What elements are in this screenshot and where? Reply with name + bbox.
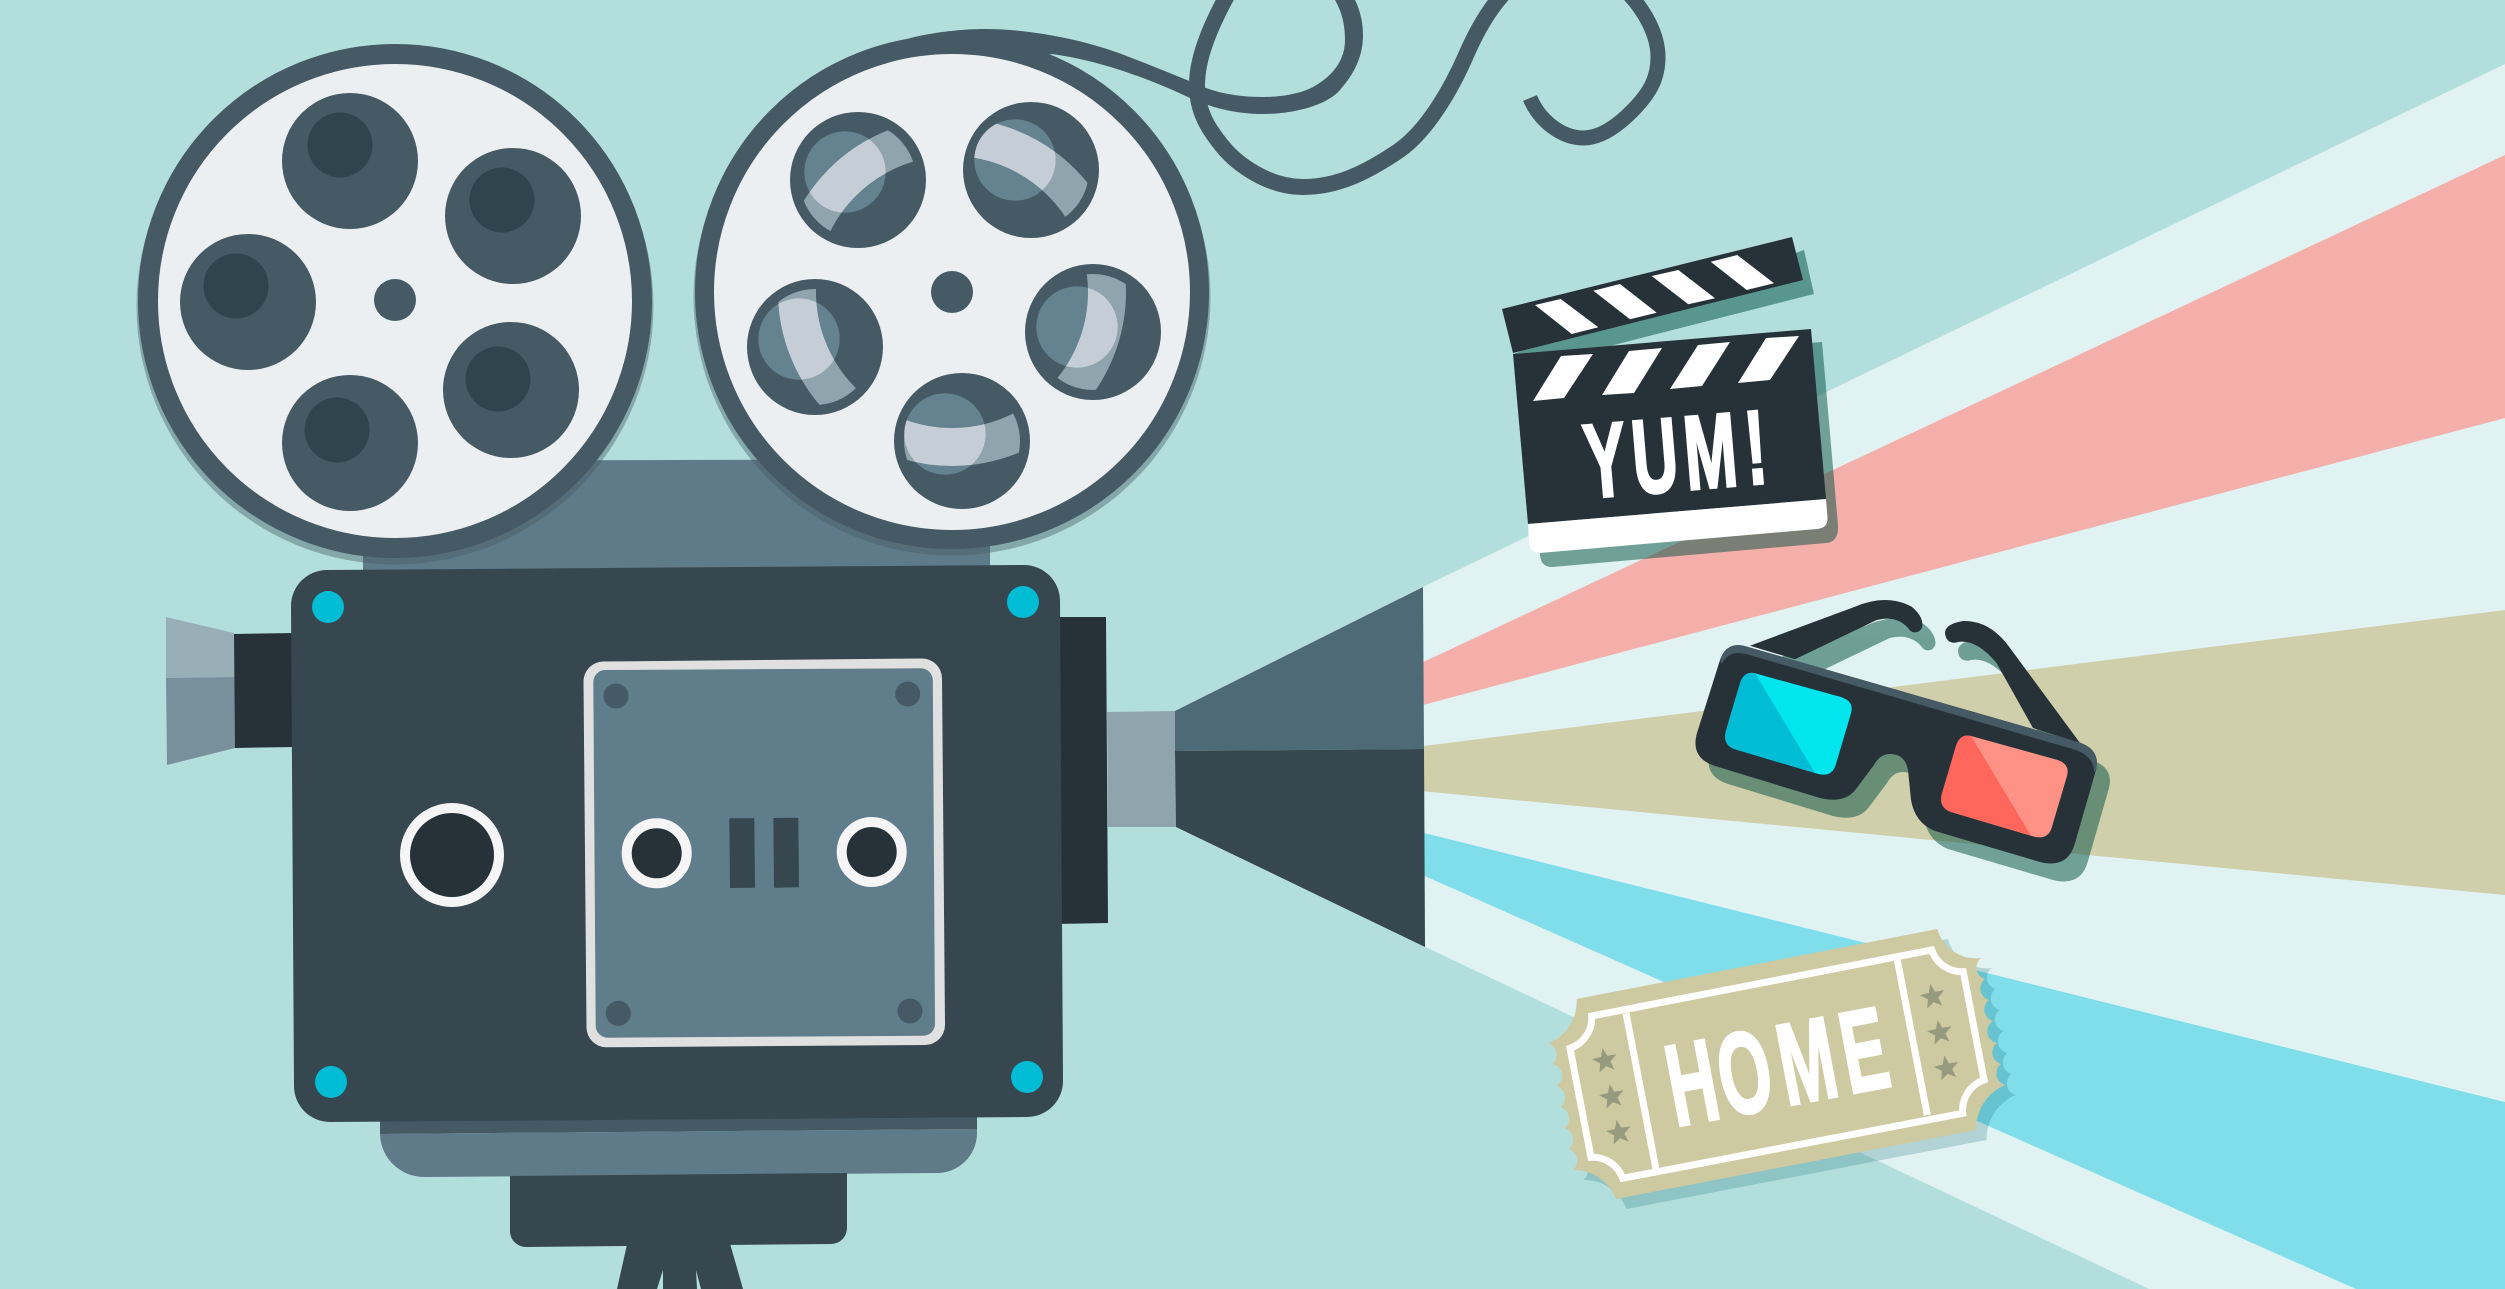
ray: cyan bbox=[1400, 827, 2505, 1289]
horn bottom bbox=[1175, 749, 1425, 947]
panel face bbox=[593, 668, 935, 1038]
left reel shadow bbox=[136, 48, 654, 564]
left reel disc bbox=[148, 54, 642, 548]
highlight overlaps on inner circles bbox=[797, 137, 1107, 447]
panel left knob bbox=[627, 823, 687, 883]
ticket inner border bbox=[1570, 950, 1984, 1178]
ray: pink bbox=[1400, 155, 2505, 711]
glasses frame bbox=[1695, 645, 2097, 863]
tripod legs bbox=[617, 1240, 743, 1289]
film strand from reel bbox=[900, 0, 1363, 114]
control panel bbox=[583, 658, 945, 1047]
film projector bbox=[136, 0, 1658, 1289]
film loop bbox=[1197, 0, 1505, 187]
upper housing behind reels bbox=[363, 459, 990, 575]
clapper arm bbox=[1502, 237, 1803, 353]
cinema ticket bbox=[1548, 929, 2016, 1209]
ticket text: HOME bbox=[1656, 983, 1898, 1152]
left reel spokes holes bbox=[180, 93, 581, 511]
clapper text: YUM! bbox=[1580, 390, 1771, 521]
left temple arm bbox=[1750, 600, 1922, 659]
clapper board stripes bbox=[1533, 336, 1799, 401]
film curl end bbox=[1530, 0, 1658, 138]
tripod head bbox=[510, 1173, 847, 1247]
rear lens lower bbox=[166, 677, 235, 765]
rear lens collar bbox=[234, 633, 295, 748]
right lens dark facet bbox=[1941, 736, 2031, 836]
right temple arm bbox=[1945, 621, 2080, 743]
right reel bbox=[704, 44, 1200, 540]
panel screws bbox=[604, 682, 922, 1026]
right red lens bbox=[1941, 736, 2068, 837]
clapper board bbox=[1513, 329, 1826, 524]
clapper arm stripes bbox=[1535, 255, 1774, 334]
right reel disc bbox=[704, 44, 1200, 540]
panel right knob bbox=[842, 822, 902, 882]
body rivets bbox=[312, 586, 1043, 1098]
ticket stars bbox=[1590, 982, 1961, 1145]
base plate strip bbox=[380, 1105, 977, 1134]
ray: olive bbox=[1400, 610, 2505, 895]
frame highlight bbox=[1720, 645, 2097, 772]
ticket body bbox=[1548, 929, 2005, 1199]
ray: pale light beam bbox=[1400, 64, 2505, 1289]
left reel inner circles bbox=[204, 112, 534, 462]
panel frame bbox=[583, 658, 945, 1047]
panel slots bbox=[729, 818, 799, 888]
rear lens upper bbox=[166, 617, 235, 678]
right reel film highlight bands bbox=[797, 137, 1107, 447]
right reel hub bbox=[931, 271, 973, 313]
glasses shadow bbox=[1708, 618, 2110, 881]
lens neck bbox=[1107, 711, 1176, 827]
clapperboard shadow bbox=[1513, 250, 1838, 567]
big knob centre bbox=[410, 813, 494, 897]
ticket shadow bbox=[1559, 939, 2016, 1209]
left cyan lens bbox=[1725, 673, 1852, 775]
big knob bbox=[400, 803, 504, 907]
clapper white strip bbox=[1528, 499, 1828, 553]
projector body bbox=[291, 565, 1063, 1122]
big knob ring bbox=[400, 803, 504, 907]
base plate bbox=[380, 1129, 977, 1177]
horn top bbox=[1175, 587, 1424, 751]
3D glasses bbox=[1695, 600, 2110, 881]
right reel shadow bbox=[694, 38, 1210, 556]
left lens dark facet bbox=[1725, 673, 1815, 773]
right reel holes bbox=[747, 102, 1161, 509]
projector light rays bbox=[1400, 64, 2505, 1289]
left reel hub bbox=[374, 279, 416, 321]
left reel bbox=[148, 54, 642, 548]
clapperboard bbox=[1502, 237, 1838, 567]
right reel inner circles bbox=[758, 119, 1118, 475]
front collar bbox=[1055, 617, 1108, 924]
